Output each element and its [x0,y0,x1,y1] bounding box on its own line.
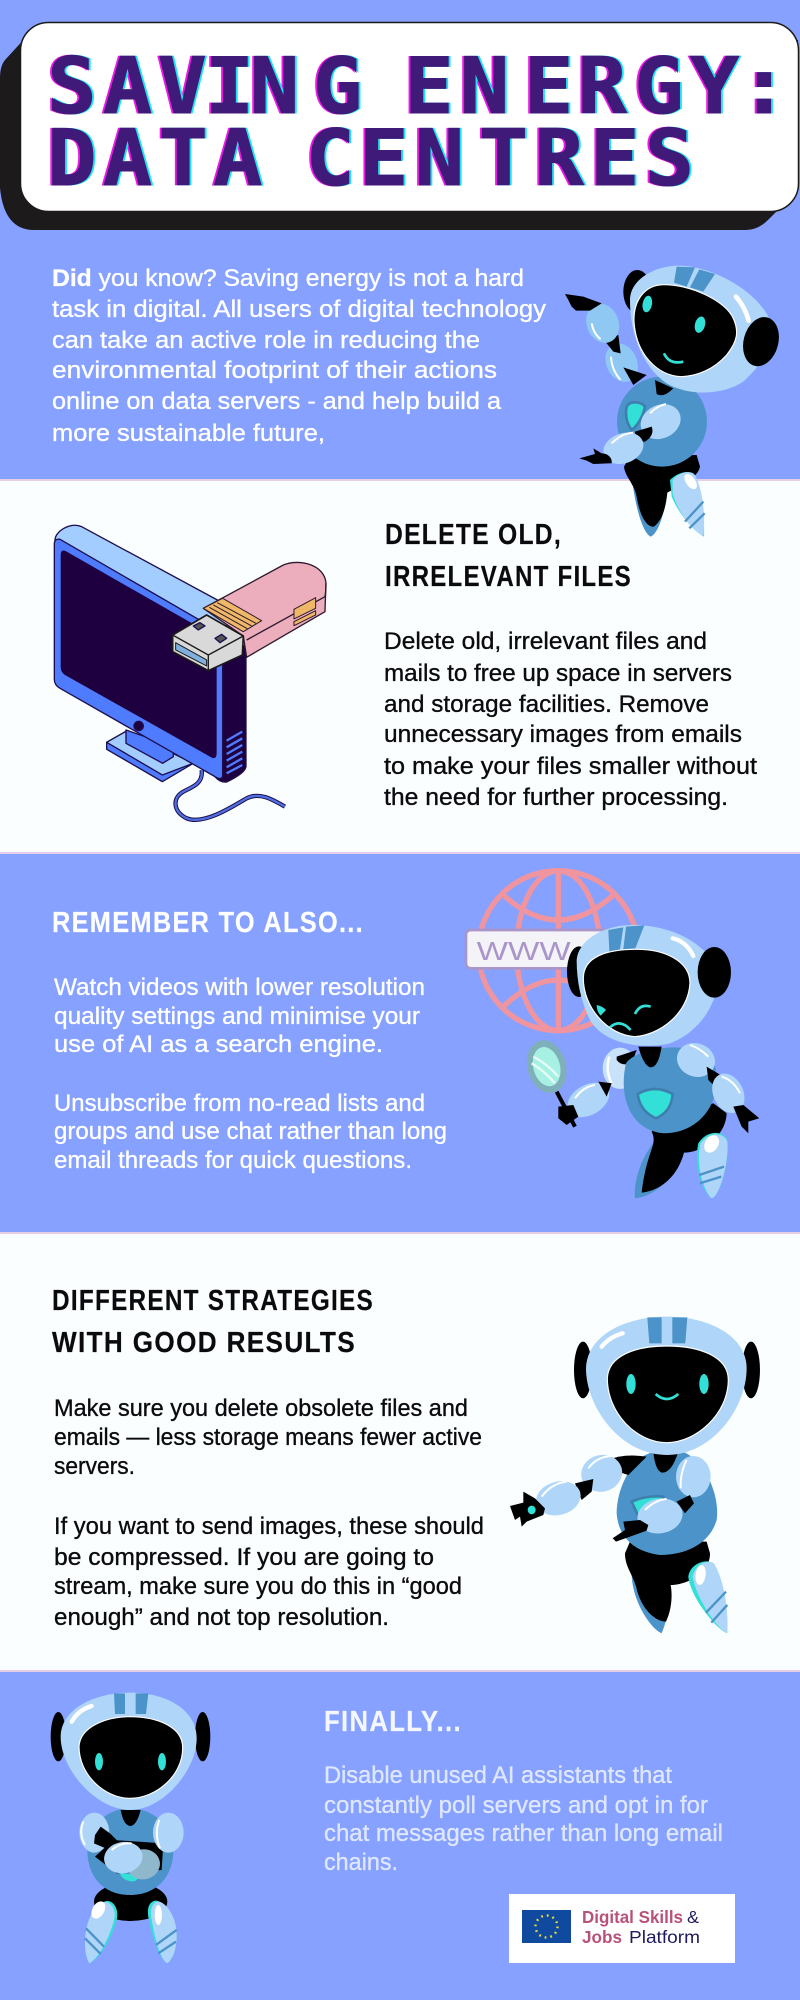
text: delete old files body: mails to free up space in servers [384,660,732,687]
heading: delete old files [385,519,632,593]
text: remember to also body: email threads for quick questions. [54,1147,412,1174]
text: intro paragraph: environmental footprint of their actions [52,357,497,384]
text: delete old files body: and storage facilities. Remove [384,691,709,718]
logo: digital skills and jobs platform [509,1894,735,1963]
title text [45,41,790,204]
title text: SAVING ENERGY: [49,41,790,132]
icon: computer monitor [54,525,285,820]
text: delete old files body: the need for further processing. [384,784,728,811]
text: strategies body: If you want to send images, these should [54,1513,484,1540]
text: intro paragraph: online on data servers - and help build a [52,388,501,415]
text: intro paragraph [52,265,547,447]
icon: eu flag [522,1910,571,1943]
title banner [0,22,798,230]
title text: DATA CENTRES [47,113,694,204]
icon: pointing robot [510,1317,760,1633]
logo text [582,1907,700,1947]
panel: different strategies [0,1234,800,1670]
text: delete old files body: to make your files smaller without [384,753,757,780]
www address bar: WWW [477,936,571,966]
icon: robot with crossed arms [51,1693,210,1963]
panel: finally [0,1672,800,2000]
title text: SAVING ENERGY: [45,41,787,132]
text: intro paragraph: can take an active role in reducing the [52,327,480,354]
logo text: & [687,1907,699,1927]
icon: globe with www bar and magnifying robot [466,871,759,1198]
panel: remember to also [0,854,800,1232]
text: finally body: constantly poll servers and opt in for [324,1792,708,1819]
title text: DATA CENTRES [49,113,696,204]
heading: different strategies: DIFFERENT STRATEGIES [52,1285,374,1317]
heading: different strategies: WITH GOOD RESULTS [52,1327,356,1359]
icon: usb stick [173,562,326,671]
text: delete old files body [384,628,757,811]
title text: SAVING ENERGY: [47,41,789,132]
heading: delete old files: DELETE OLD, [385,519,562,551]
text: strategies body: Make sure you delete obsolete files and [54,1395,468,1422]
icon: robot with magnifier [521,925,759,1198]
text: strategies body: stream, make sure you do this in “good [54,1573,462,1600]
text: strategies body: be compressed. If you are going to [54,1544,434,1571]
text: remember to also body: quality settings and minimise your [54,1003,420,1030]
logo text: Platform [629,1927,700,1947]
text: delete old files body: Delete old, irrelevant files and [384,628,707,655]
text: intro paragraph: more sustainable future, [52,420,325,447]
text: strategies body: enough” and not top resolution. [54,1604,389,1631]
text: remember to also body: Watch videos with lower resolution [54,974,425,1001]
icon: monitor with usb stick [54,525,326,820]
text: remember to also body [54,974,447,1174]
text: remember to also body: groups and use chat rather than long [54,1118,447,1145]
logo text: Digital Skills [582,1907,683,1927]
title text: DATA CENTRES [45,113,692,204]
panel: delete old files [0,481,800,852]
text: strategies body: emails — less storage means fewer active [54,1424,482,1451]
panel: did you know intro [0,232,800,537]
text: remember to also body: Unsubscribe from no-read lists and [54,1090,425,1117]
text: intro paragraph: task in digital. All users of digital technology [52,296,547,323]
text: finally body: chat messages rather than long email [324,1820,723,1847]
text: strategies body: servers. [54,1453,135,1480]
heading: different strategies [52,1285,374,1359]
text: delete old files body: unnecessary images from emails [384,721,742,748]
www address bar [466,930,616,968]
text: strategies body [54,1395,484,1631]
text: remember to also body: use of AI as a search engine. [54,1031,383,1058]
text: finally body: chains. [324,1849,398,1876]
text: finally body: Disable unused AI assistants that [324,1762,672,1789]
logo text: Jobs [582,1927,622,1947]
heading: remember to also: REMEMBER TO ALSO... [52,907,364,939]
icon: waving robot [565,266,784,537]
heading: finally: FINALLY... [324,1706,462,1738]
text: finally body [324,1762,723,1876]
icon: globe [478,871,638,1031]
text: intro paragraph: Did you know? Saving energy is not a hard [52,265,524,292]
heading: delete old files: IRRELEVANT FILES [385,561,632,593]
